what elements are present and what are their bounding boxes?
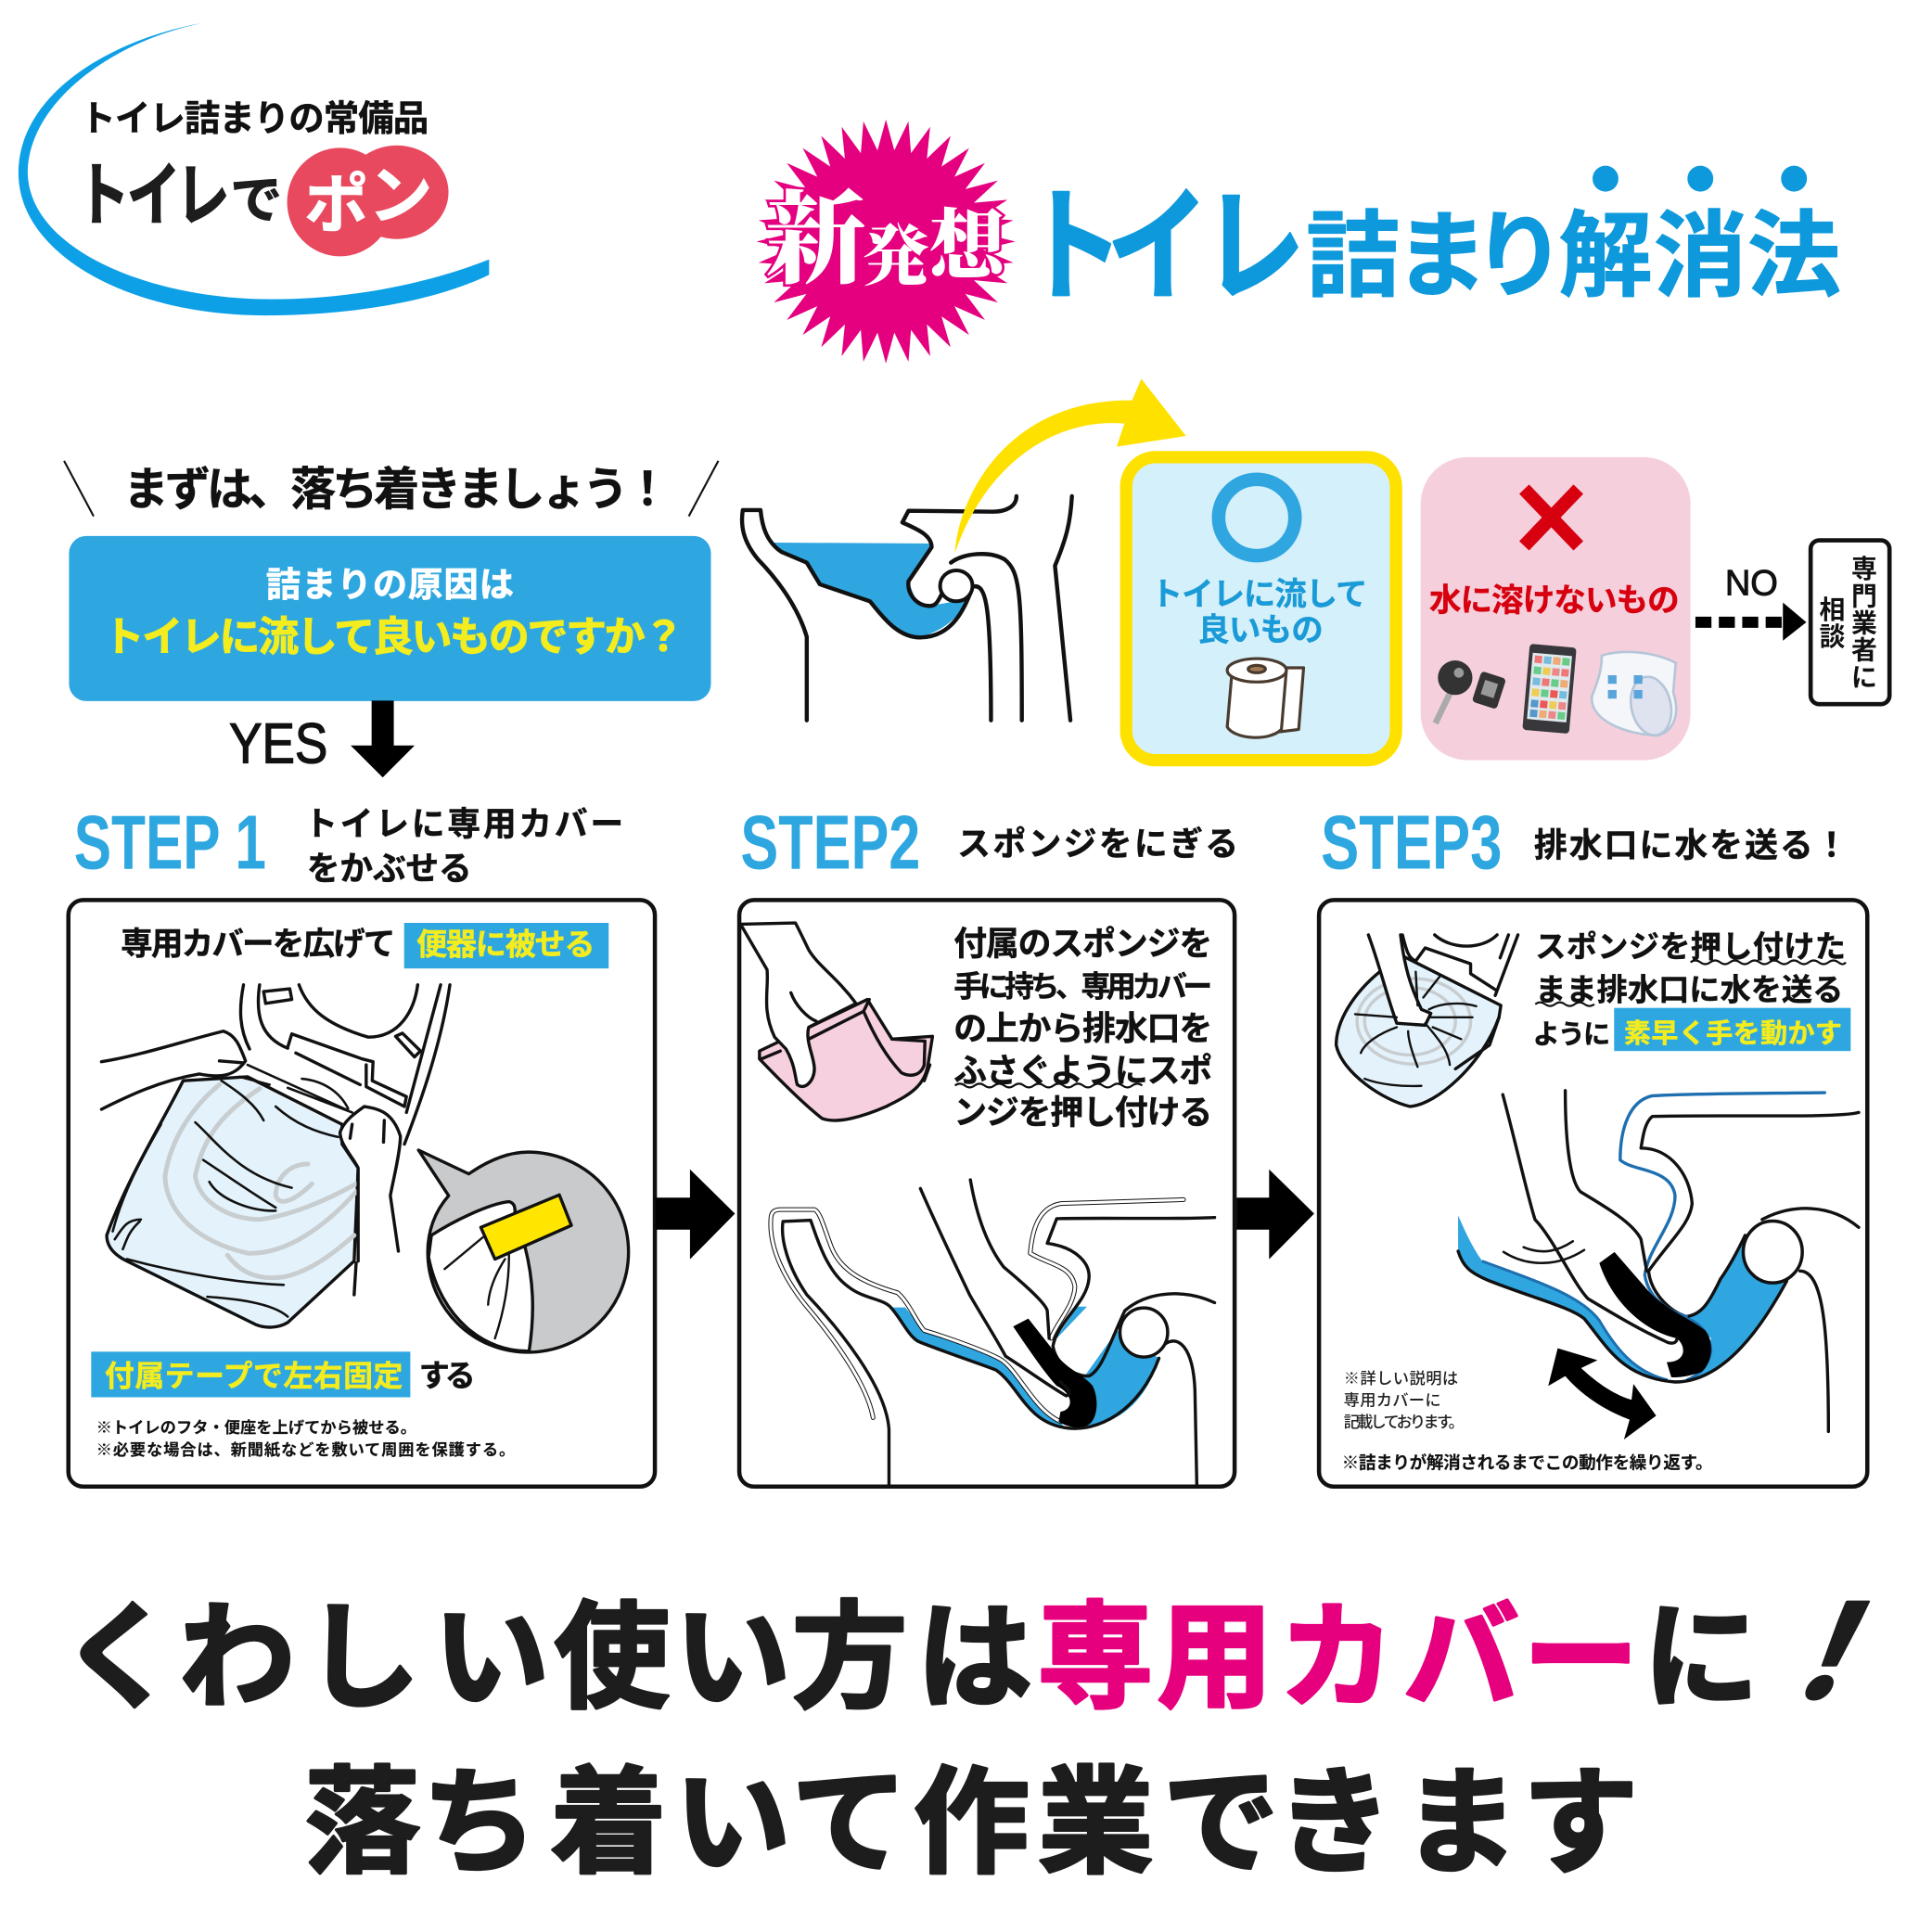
heading text: まずは、落ち着きましょう！ (123, 466, 671, 516)
arrow between step 1 and 2 (656, 1170, 735, 1260)
bottom note: ※詰まりが解消されるまでこの動作を繰り返す。 (1342, 1453, 1713, 1473)
trap upper (1047, 1218, 1215, 1376)
burst text: 発 (863, 203, 929, 300)
title kanji: 詰まり解消法 (1306, 205, 1841, 309)
gray toilet inner (1364, 988, 1455, 1055)
ball (1743, 1221, 1802, 1283)
panel frame (69, 900, 655, 1487)
see-through toilet (165, 1084, 356, 1278)
cloth folds (444, 1237, 509, 1338)
panel: not ok to flush (1421, 457, 1691, 761)
calm down heading (64, 461, 718, 517)
question line 1: 詰まりの原因は (266, 565, 514, 604)
icon: keys (1436, 660, 1506, 723)
step 2 caption: スポンジをにぎる (957, 825, 1238, 863)
right wall (1055, 496, 1072, 721)
cross mark (1524, 489, 1579, 546)
arrow between step 2 and 3 (1236, 1170, 1314, 1260)
double upper center (1030, 1199, 1184, 1338)
logo swoosh (19, 23, 489, 315)
illustration: hand holding sponge (740, 923, 932, 1120)
left hands (101, 1031, 246, 1109)
bowl outline (783, 1221, 1159, 1485)
cloth (429, 1202, 532, 1351)
bottom line 1: 専用カバー (1038, 1594, 1639, 1723)
side note: 専用カバーに (1344, 1391, 1441, 1410)
double rim line (771, 1209, 1060, 1422)
double upper line (1030, 1199, 1184, 1338)
blue box (69, 536, 711, 701)
motion lines (1503, 1241, 1584, 1263)
illustration: sponge in drain (771, 1180, 1215, 1485)
side note (1344, 1369, 1465, 1431)
pink starburst (757, 120, 1016, 364)
dark water line (1482, 1261, 1711, 1380)
highlighted text: 便器に被せる (416, 928, 595, 963)
logo name: トイレ (76, 159, 230, 235)
box frame (1810, 541, 1889, 704)
side note: ※詳しい説明は (1344, 1369, 1458, 1388)
water (1458, 1216, 1786, 1382)
illustration: pressing sponge over cover (1337, 935, 1518, 1107)
black sponge (1599, 1252, 1711, 1377)
trap arch (951, 554, 1022, 721)
dashed shaft (1695, 618, 1785, 626)
logo tagline: トイレ詰まりの常備品 (80, 99, 429, 139)
icon: smartphone (1522, 644, 1577, 734)
water (772, 543, 970, 637)
logo: toilet de pon (19, 23, 489, 315)
note 2: ※必要な場合は、新聞紙などを敷いて周囲を保護する。 (96, 1440, 515, 1459)
instruction text (953, 926, 1212, 1132)
step 3 heading (1321, 800, 1849, 886)
logo de: で (230, 171, 282, 229)
no arrow (1695, 564, 1806, 641)
main title (1022, 166, 1841, 316)
illustration: moving the hand (1458, 1091, 1859, 1439)
instruction text: 専用カバーを広げて (121, 928, 395, 963)
bowl bottom (1458, 1251, 1786, 1382)
illustration: covering the toilet (101, 985, 450, 1327)
instruction text: 付属のスポンジを (953, 926, 1212, 963)
right wall (1165, 1341, 1196, 1485)
arrow head (1783, 603, 1806, 641)
consult professional box (1810, 541, 1889, 704)
bowl outline (742, 510, 970, 721)
step 1 label: STEP 1 (74, 800, 266, 886)
step 2 heading (740, 800, 1238, 886)
question line 2: トイレに流して良いものですか？ (104, 614, 684, 659)
bottom line 1: ！ (1739, 1582, 1931, 1725)
left slash (64, 461, 94, 517)
sponge edges (761, 992, 930, 1081)
note 1: ※トイレのフタ・便座を上げてから被せる。 (96, 1418, 416, 1437)
highlight box (404, 923, 608, 968)
logo red circles (288, 146, 449, 256)
wavy underline (955, 1083, 1142, 1087)
hand (740, 923, 856, 1086)
right hand fill (340, 1107, 401, 1196)
ball (940, 570, 972, 601)
side note: 記載しております。 (1344, 1413, 1465, 1431)
icon: toilet paper (1227, 659, 1303, 737)
panel: step 2 (739, 900, 1235, 1487)
callout circle (418, 1150, 629, 1352)
down arrow (351, 700, 415, 777)
upper trap (1641, 1112, 1859, 1316)
flushable text 2: 良いもの (1197, 613, 1324, 648)
step 2 label: STEP2 (740, 800, 920, 886)
tape detail callout (418, 1150, 629, 1352)
arm (1503, 1091, 1677, 1343)
pink box (1421, 457, 1691, 761)
ball (1120, 1308, 1168, 1357)
panel: step 1 (69, 900, 655, 1487)
cover (1337, 956, 1501, 1107)
toilet cross section (742, 378, 1186, 721)
fix text: 付属テープで左右固定 (105, 1359, 403, 1392)
instruction text: スポンジを押し付けた (1535, 930, 1846, 965)
panel frame (1319, 900, 1867, 1487)
blue cover line (1620, 1093, 1824, 1316)
yes label: YES (229, 711, 327, 774)
instruction text (1533, 930, 1846, 1050)
title burst (757, 120, 1016, 364)
step 3 label: STEP3 (1321, 800, 1502, 886)
trap outline (902, 496, 1017, 606)
wavy underlines (1535, 961, 1846, 1006)
insoluble text: 水に溶けないもの (1429, 583, 1680, 619)
step 1 caption line 2: をかぶせる (307, 851, 472, 888)
water (892, 1307, 1159, 1427)
bottom line 1: くわしい使い方は (61, 1594, 1032, 1723)
step 3 caption: 排水口に水を送る！ (1534, 826, 1849, 864)
toilet seat (240, 985, 450, 1145)
icon: diaper (1592, 652, 1677, 739)
yellow tape (480, 1195, 571, 1260)
arm (920, 1180, 1069, 1396)
no label: NO (1725, 564, 1778, 604)
bottom line 1 (61, 1582, 1931, 1725)
burst text: 想 (929, 185, 1012, 295)
right arch (1762, 1209, 1859, 1431)
fix text highlight (91, 1351, 410, 1397)
sponge (760, 1000, 932, 1120)
question box (69, 536, 711, 701)
panel frame (739, 900, 1235, 1487)
double rim center (771, 1209, 1060, 1422)
highlight box (1614, 1008, 1850, 1051)
bottom message (61, 1582, 1931, 1888)
bottom line 1: に (1644, 1594, 1759, 1723)
step 1 caption: トイレに専用カバー (304, 806, 623, 843)
yellow curved arrow (954, 378, 1186, 554)
burst text: 新 (765, 160, 866, 304)
double arrow (1548, 1349, 1657, 1439)
radial wrinkles (1355, 972, 1477, 1086)
instruction text: 手に持ち、専用カバー (953, 970, 1212, 1004)
cover bag (107, 1077, 358, 1327)
title katakana: トイレ (1022, 178, 1304, 316)
instruction text: ンジを押し付ける (953, 1094, 1212, 1132)
right hand outline (220, 1061, 401, 1295)
instruction text: ように (1533, 1020, 1610, 1050)
wrinkles (113, 1065, 352, 1316)
yes arrow (229, 700, 415, 777)
vertical text right: 専門業者に (1851, 555, 1877, 692)
trap inner (970, 586, 991, 721)
flushable text: トイレに流して (1151, 577, 1368, 612)
instruction text: ふさぐようにスポ (953, 1052, 1212, 1089)
panel: ok to flush (1126, 457, 1396, 761)
gray toilet (1357, 979, 1471, 1064)
logo pon text: ポ (304, 168, 368, 240)
circle mark (1219, 480, 1295, 556)
black sponge (1013, 1319, 1096, 1427)
panel: step 3 (1319, 900, 1867, 1487)
instruction text: の上から排水口を (953, 1010, 1212, 1047)
fix text suffix: する (419, 1359, 476, 1393)
arm and gather (1368, 935, 1431, 1025)
bottom line 2: 落ち着いて作業できます (304, 1759, 1639, 1888)
highlighted text: 素早く手を動かす (1624, 1018, 1842, 1049)
logo pon text: ン (368, 160, 432, 232)
vertical text left: 相談 (1819, 595, 1845, 651)
right slash (689, 461, 718, 517)
yellow frame (1126, 457, 1396, 761)
step 1 heading (74, 800, 623, 888)
emphasis dots (1593, 166, 1807, 192)
seat (1402, 935, 1518, 1068)
instruction text: まま排水口に水を送る (1535, 974, 1843, 1008)
